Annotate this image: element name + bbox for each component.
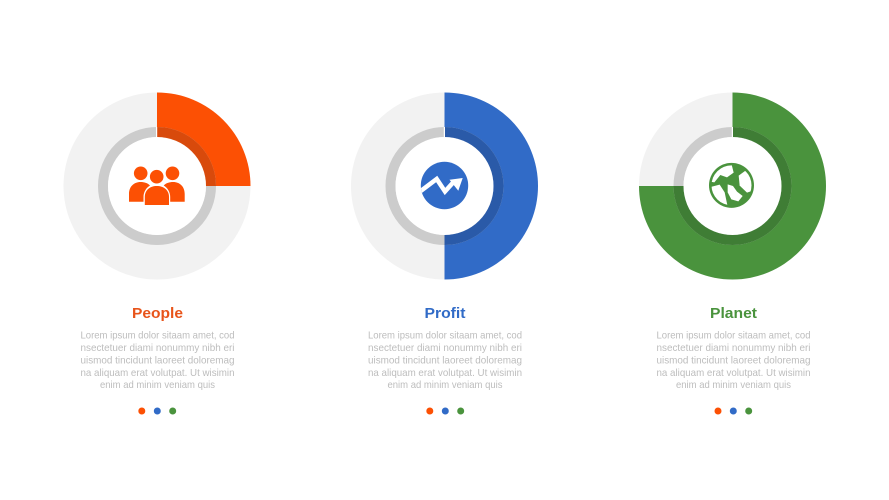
pagination dots: planet: [714, 408, 752, 414]
icon: globe: [709, 163, 755, 208]
panel: profit: [351, 92, 538, 414]
text block: planet: enim ad minim veniam quis: [676, 380, 791, 391]
icon: people group: [129, 166, 185, 205]
text block: profit: nsectetuer diami nonummy nibh eri: [368, 343, 522, 354]
text block: planet: [656, 330, 811, 391]
text block: people: uismod tincidunt laoreet doloremag: [80, 356, 235, 366]
text block: profit: na aliquam erat volutpat. Ut wisimin: [368, 368, 522, 379]
text block: profit: [368, 330, 522, 391]
donut chart: profit: [351, 92, 538, 280]
text block: people: Lorem ipsum dolor sitaam amet, cod: [80, 330, 235, 342]
panel: planet: [639, 92, 826, 414]
icon: rising arrow: [418, 162, 468, 209]
donut chart: people: [64, 92, 250, 280]
text block: profit: Lorem ipsum dolor sitaam amet, cod: [368, 330, 522, 342]
donut chart: planet: [639, 92, 826, 280]
text block: people: enim ad minim veniam quis: [100, 380, 215, 391]
pagination dots: profit: [426, 408, 464, 414]
infographic: [64, 92, 826, 414]
text block: people: [80, 330, 235, 391]
heading: Planet: Planet: [710, 305, 757, 322]
text block: people: na aliquam erat volutpat. Ut wisimin: [80, 368, 234, 379]
text block: planet: Lorem ipsum dolor sitaam amet, cod: [656, 330, 811, 342]
panel: people: [64, 92, 250, 414]
text block: planet: uismod tincidunt laoreet doloremag: [656, 356, 811, 366]
text block: planet: nsectetuer diami nonummy nibh eri: [656, 343, 810, 354]
heading: People: People: [132, 305, 183, 322]
text block: profit: uismod tincidunt laoreet doloremag: [368, 356, 522, 366]
text block: profit: enim ad minim veniam quis: [388, 380, 502, 391]
text block: people: nsectetuer diami nonummy nibh eri: [80, 343, 234, 354]
heading: Profit: Profit: [424, 305, 466, 322]
text block: planet: na aliquam erat volutpat. Ut wisimin: [656, 368, 810, 379]
pagination dots: people: [138, 408, 176, 414]
